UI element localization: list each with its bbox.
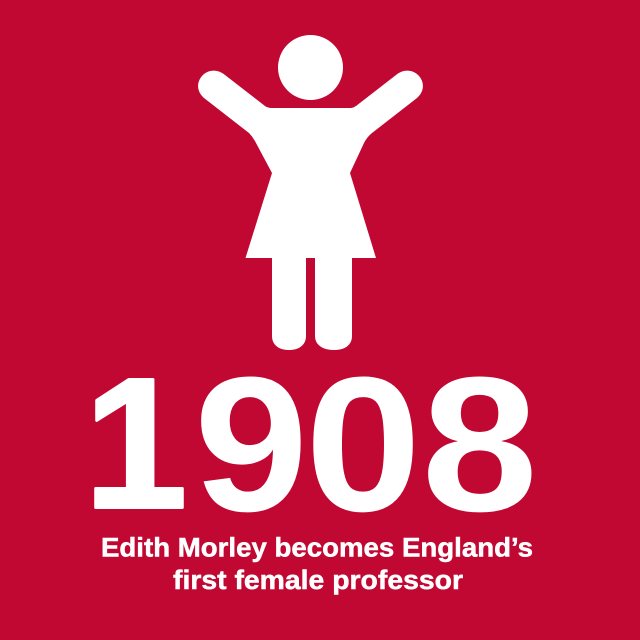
- caption: Edith Morley becomes England’s: [101, 532, 533, 562]
- year: 1908: 8: [422, 336, 538, 552]
- caption: [101, 532, 533, 595]
- year: 1908: 1: [84, 340, 187, 548]
- year: 1908: [84, 336, 538, 552]
- year: 1908: 0: [305, 336, 421, 552]
- year: 1908: 9: [194, 338, 308, 552]
- icon: female figure with raised arms: [198, 35, 423, 350]
- caption: first female professor: [173, 565, 464, 595]
